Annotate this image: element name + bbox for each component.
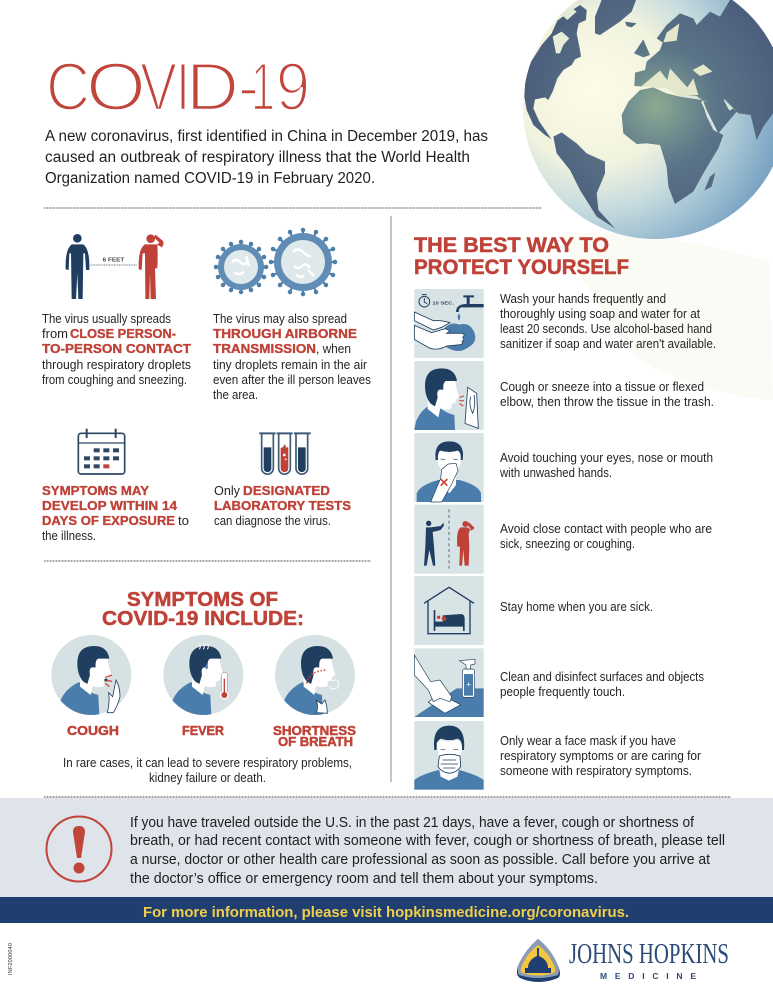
text: laboratory tests bbox=[214, 483, 351, 528]
text: person to person contact: CLOSE PERSON- bbox=[70, 326, 176, 341]
icon: calendar bbox=[78, 429, 125, 474]
text: symptoms timeframe: the illness. bbox=[42, 529, 96, 543]
text: airborne transmission: TRANSMISSION bbox=[213, 341, 316, 356]
panel: clean surfaces bbox=[414, 648, 484, 717]
title: 9 bbox=[276, 49, 310, 125]
icon: fever bbox=[163, 635, 243, 717]
text: avoid touching: Avoid touching your eyes, nose or mouth bbox=[500, 451, 713, 465]
globe bbox=[523, 0, 773, 239]
text: airborne transmission: The virus may also spread bbox=[213, 312, 347, 326]
text: wash hands: Wash your hands frequently and bbox=[500, 292, 666, 306]
title: O bbox=[86, 49, 146, 125]
icon: cough bbox=[51, 635, 131, 717]
logo: Johns Hopkins Medicine bbox=[517, 938, 729, 982]
label: shortness of breath bbox=[273, 723, 356, 749]
title: I bbox=[176, 49, 190, 125]
label: fever: FEVER bbox=[182, 723, 225, 738]
title: D bbox=[186, 49, 239, 125]
title bbox=[46, 49, 310, 125]
print code: INF2000040 bbox=[8, 943, 14, 975]
icon: test tubes bbox=[259, 433, 311, 474]
text: clean and disinfect: Clean and disinfect surfaces and objects bbox=[500, 670, 704, 684]
label: shortness of breath: SHORTNESS bbox=[273, 723, 356, 738]
text: wash hands: sanitizer if soap and water aren't available. bbox=[500, 337, 716, 351]
text: laboratory tests: Only bbox=[214, 484, 241, 498]
text: laboratory tests: DESIGNATED bbox=[243, 483, 330, 498]
text: wash hands: least 20 seconds. Use alcohol-based hand bbox=[500, 322, 712, 336]
text: clean and disinfect bbox=[500, 670, 704, 699]
text: airborne transmission: THROUGH AIRBORNE bbox=[213, 326, 357, 341]
text: face mask: someone with respiratory symptoms. bbox=[500, 764, 692, 778]
text: airborne transmission: the area. bbox=[213, 388, 258, 402]
text: airborne transmission: tiny droplets remain in the air bbox=[213, 358, 367, 372]
heading: symptoms: COVID-19 INCLUDE: bbox=[102, 608, 304, 630]
text: stay home: Stay home when you are sick. bbox=[500, 600, 653, 614]
text: person to person contact: The virus usually spreads bbox=[42, 312, 171, 326]
intro text bbox=[45, 128, 488, 187]
panel: wash hands bbox=[414, 289, 484, 358]
text: person to person contact bbox=[42, 312, 191, 387]
text: rare cases bbox=[63, 756, 352, 785]
text: rare cases: kidney failure or death. bbox=[149, 771, 266, 785]
panel: avoid touching face bbox=[414, 433, 484, 502]
text: person to person contact: from bbox=[42, 327, 68, 341]
text: cough or sneeze bbox=[500, 380, 714, 409]
title: - bbox=[238, 49, 259, 125]
text: avoid touching bbox=[499, 451, 713, 480]
intro text: Organization named COVID-19 in February 2020. bbox=[45, 170, 375, 187]
panel: travel alert bbox=[0, 797, 773, 897]
heading: best way to protect yourself bbox=[414, 234, 629, 279]
panel: avoid close contact bbox=[414, 505, 484, 574]
text: cough or sneeze: Cough or sneeze into a tissue or flexed bbox=[500, 380, 704, 394]
text: laboratory tests: can diagnose the virus. bbox=[214, 514, 331, 528]
panel: travel alert: breath, or had recent contact with someone with fever, cough or shortness of breath, please tell bbox=[130, 833, 725, 849]
intro text: caused an outbreak of respiratory illness that the World Health bbox=[45, 149, 470, 166]
icon: six feet distance bbox=[66, 234, 164, 299]
label: cough: COUGH bbox=[67, 723, 119, 738]
title: C bbox=[46, 49, 90, 125]
icon: shortness of breath bbox=[275, 635, 355, 717]
text: clean and disinfect: people frequently touch. bbox=[500, 685, 625, 699]
text: symptoms timeframe: SYMPTOMS MAY bbox=[42, 483, 149, 498]
text: avoid touching: with unwashed hands. bbox=[499, 466, 612, 480]
text: cough or sneeze: elbow, then throw the tissue in the trash. bbox=[500, 395, 714, 409]
panel: cough into tissue bbox=[414, 361, 484, 430]
panel: stay home bbox=[414, 576, 484, 645]
title: 1 bbox=[251, 49, 275, 125]
title: V bbox=[140, 49, 178, 125]
text: face mask: respiratory symptoms or are caring for bbox=[500, 749, 701, 763]
text: person to person contact: from coughing and sneezing. bbox=[42, 373, 187, 387]
text: person to person contact: through respiratory droplets bbox=[42, 358, 191, 372]
text: laboratory tests: LABORATORY TESTS bbox=[214, 498, 351, 513]
label: shortness of breath: OF BREATH bbox=[278, 734, 353, 749]
text: wash hands: thoroughly using soap and water for at bbox=[500, 307, 700, 321]
text: avoid contact bbox=[500, 522, 712, 551]
heading: symptoms: SYMPTOMS OF bbox=[127, 589, 278, 611]
logo: Johns Hopkins Medicine: MEDICINE bbox=[600, 971, 696, 981]
text: symptoms timeframe: DAYS OF EXPOSURE bbox=[42, 513, 175, 528]
icon: six feet distance: 6 FEET bbox=[103, 258, 125, 264]
text: symptoms timeframe bbox=[42, 483, 189, 543]
heading: best way to protect yourself: THE BEST WAY TO bbox=[414, 234, 609, 257]
faint globe watermark bbox=[560, 233, 773, 400]
icon: virus particles bbox=[216, 230, 335, 294]
panel: travel alert: a nurse, doctor or other health care professional as soon as possible. Call before you arrive at bbox=[130, 852, 710, 868]
text: avoid contact: Avoid close contact with people who are bbox=[500, 522, 712, 536]
text: person to person contact: TO-PERSON CONTACT bbox=[42, 341, 191, 356]
text: airborne transmission: even after the ill person leaves bbox=[213, 373, 371, 387]
text: symptoms timeframe: to bbox=[178, 514, 189, 528]
panel: wash hands: 10 SEC. bbox=[432, 301, 454, 306]
text: rare cases: In rare cases, it can lead to severe respiratory problems, bbox=[63, 756, 352, 770]
panel: travel alert: If you have traveled outside the U.S. in the past 21 days, have a fever, cough or shortness of bbox=[130, 815, 695, 831]
banner: more information: For more information, please visit hopkinsmedicine.org/coronavirus. bbox=[143, 904, 629, 921]
text: face mask bbox=[500, 734, 701, 778]
text: airborne transmission bbox=[213, 312, 371, 402]
text: airborne transmission: , when bbox=[316, 342, 351, 356]
text: wash hands bbox=[500, 292, 716, 351]
text: symptoms timeframe: DEVELOP WITHIN 14 bbox=[42, 498, 178, 513]
heading: symptoms bbox=[102, 589, 304, 630]
panel: face mask bbox=[414, 721, 484, 790]
panel: travel alert: the doctor’s office or emergency room and tell them about your symptoms. bbox=[130, 871, 598, 887]
intro text: A new coronavirus, first identified in China in December 2019, has bbox=[45, 128, 488, 145]
text: face mask: Only wear a face mask if you have bbox=[500, 734, 676, 748]
text: avoid contact: sick, sneezing or coughing. bbox=[500, 537, 635, 551]
banner: more information bbox=[0, 897, 773, 923]
heading: best way to protect yourself: PROTECT YOURSELF bbox=[414, 256, 629, 279]
